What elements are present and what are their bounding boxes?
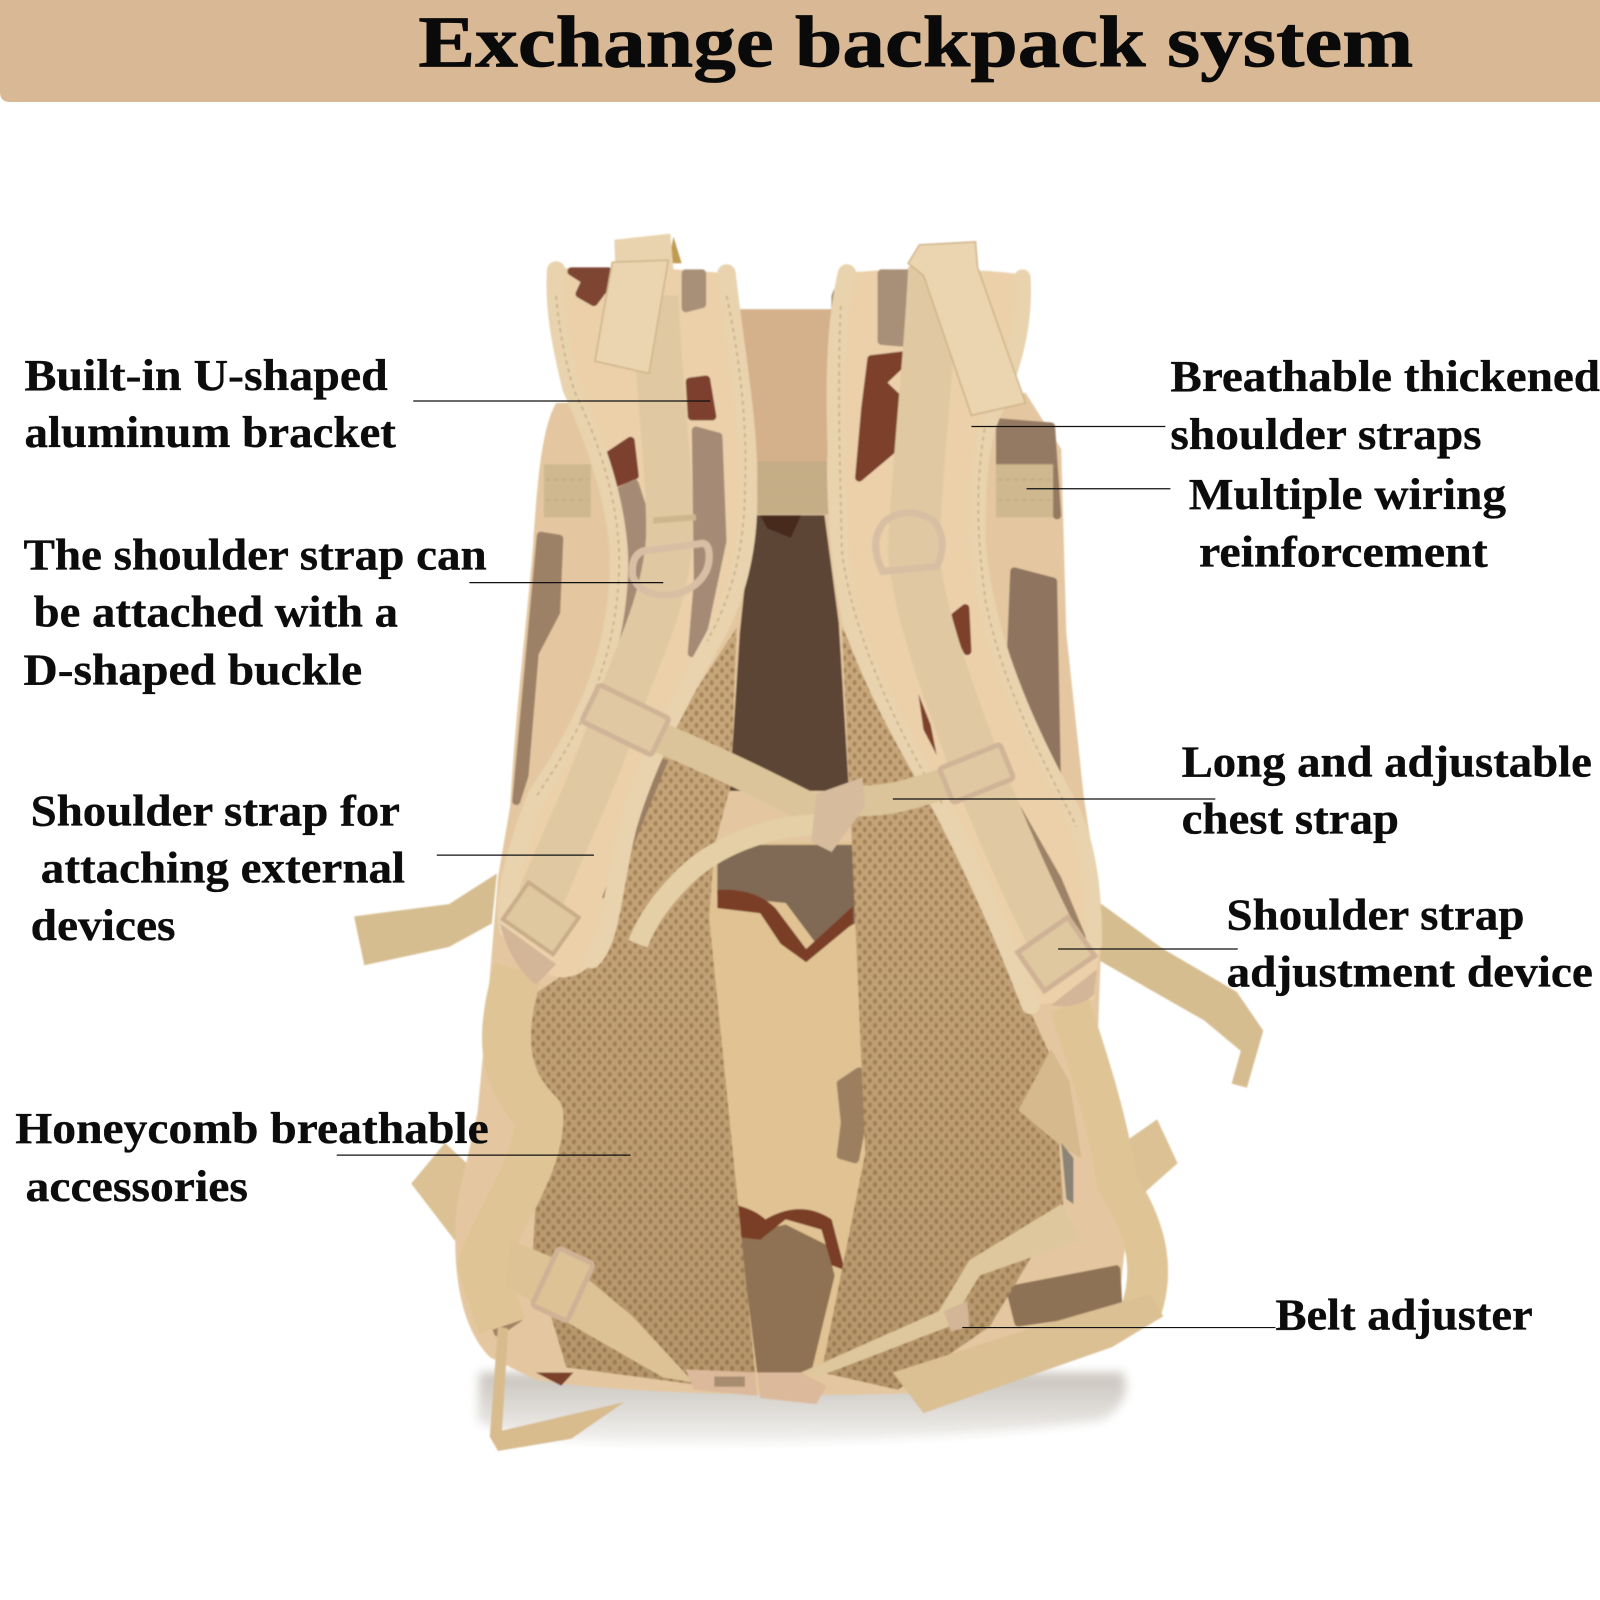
right strap webbing	[913, 267, 1061, 954]
label: shoulder straps	[1170, 351, 1600, 459]
leader line: wiring	[1027, 488, 1170, 490]
lower side strap left	[411, 1143, 502, 1241]
backpack illustration	[354, 234, 1263, 1451]
honeycomb mesh panels	[510, 628, 1063, 1390]
label: D-shaped buckle: The shoulder strap can	[23, 529, 487, 579]
label: strap adjuster: Shoulder strap	[1227, 890, 1524, 940]
chest buckle	[811, 778, 865, 852]
left top flap	[595, 234, 682, 373]
leader line: shoulder straps	[971, 426, 1165, 428]
side strap right	[1097, 903, 1263, 1088]
pad edges	[836, 273, 1031, 1005]
leader line: belt adjuster	[962, 1327, 1276, 1329]
label: wiring: Multiple wiring	[1189, 469, 1506, 519]
mesh left	[510, 628, 755, 1386]
label: strap adjuster: adjustment device	[1227, 947, 1593, 997]
leader line: strap adjuster	[1058, 948, 1238, 950]
chest slider right	[939, 744, 1014, 803]
chest slider left	[582, 684, 669, 755]
hip strap left	[482, 969, 539, 1327]
belt buckle	[686, 1369, 827, 1404]
ground shadow	[478, 1372, 1126, 1443]
label: honeycomb: Honeycomb breathable	[15, 1103, 489, 1153]
right top flap	[908, 242, 1026, 415]
label: external devices: devices	[31, 900, 176, 950]
webbing loop band left	[544, 464, 591, 517]
label: chest strap: chest strap	[1182, 794, 1399, 844]
camo taupe side	[841, 1071, 862, 1159]
leader line: D-buckle	[469, 582, 663, 584]
label: external devices: Shoulder strap for	[31, 786, 400, 836]
label: U-shaped bracket: Built-in U-shaped	[24, 350, 388, 400]
mesh right	[821, 628, 1063, 1390]
lower left strap buckle	[500, 882, 579, 985]
chest strap right	[857, 781, 954, 801]
body silhouette	[455, 393, 1128, 1395]
lower side strap right	[1120, 1119, 1178, 1196]
title: Exchange backpack system	[418, 1, 1413, 82]
camo patches	[882, 273, 908, 343]
body camouflage patches	[484, 422, 1118, 1386]
left D-ring	[632, 543, 709, 595]
label: wiring: reinforcement	[1199, 526, 1488, 576]
camo patches	[571, 271, 608, 302]
leader line: chest strap	[893, 798, 1215, 800]
label: wiring	[1189, 469, 1506, 576]
leader line: external devices	[437, 854, 594, 856]
leader line: U-shaped bracket	[413, 400, 710, 402]
centre back panel	[709, 842, 865, 1372]
lower right strap adjuster	[1018, 917, 1097, 1006]
right hip belt	[801, 1204, 1082, 1378]
side strap left	[354, 873, 497, 965]
hip strap thin tail left	[490, 1327, 624, 1451]
camo red brown upper	[717, 890, 853, 962]
right belt end	[893, 1294, 1163, 1413]
chest strap tail	[638, 824, 816, 944]
right zip	[1061, 1143, 1073, 1204]
label: chest strap	[1182, 737, 1592, 844]
leader line: honeycomb	[337, 1154, 631, 1156]
left strap webbing	[541, 296, 670, 898]
pale side flap near zip	[1018, 1049, 1082, 1158]
label: D-shaped buckle: be attached with a	[34, 587, 398, 637]
dark inner panel	[730, 515, 849, 791]
chest strap left	[653, 735, 816, 811]
label: honeycomb: accessories	[26, 1161, 248, 1211]
pad inner dark side	[728, 276, 753, 429]
webbing loop band centre	[748, 461, 832, 514]
left shoulder pad	[497, 268, 753, 977]
label: D-shaped buckle: D-shaped buckle	[23, 645, 362, 695]
right D-ring	[876, 513, 942, 571]
camo upper dark	[717, 845, 855, 944]
right shoulder pad	[828, 269, 1100, 1005]
label: external devices: attaching external	[41, 843, 405, 893]
label: honeycomb	[15, 1103, 489, 1211]
hip strap right	[1069, 1005, 1148, 1311]
camo red brown lower	[733, 1204, 845, 1270]
label: shoulder straps: shoulder straps	[1170, 409, 1482, 459]
label: belt adjuster: Belt adjuster	[1276, 1290, 1533, 1340]
pad edges	[592, 273, 748, 959]
header band	[0, 0, 1600, 102]
webbing loop band right	[996, 464, 1053, 517]
label: D-shaped buckle	[23, 529, 487, 695]
label: strap adjuster	[1227, 890, 1593, 997]
label: shoulder straps: Breathable thickened	[1170, 351, 1600, 401]
camo taupe lower	[740, 1224, 835, 1372]
label: U-shaped bracket: aluminum bracket	[24, 407, 396, 457]
label: U-shaped bracket	[24, 350, 396, 457]
left hip belt	[505, 1240, 694, 1383]
label: external devices	[31, 786, 405, 950]
top centre panel	[735, 309, 832, 462]
label: chest strap: Long and adjustable	[1182, 737, 1592, 787]
chest strap	[582, 684, 1014, 944]
